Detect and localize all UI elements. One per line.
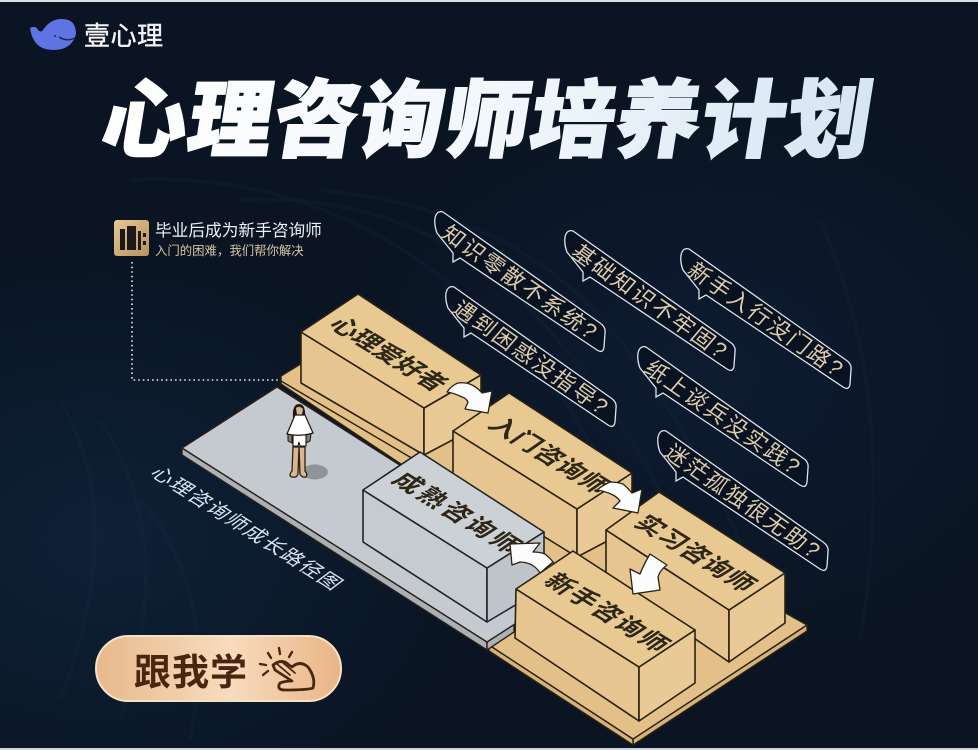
graduate note: 毕业后成为新手咨询师 [155, 221, 322, 240]
graduate note [114, 220, 322, 258]
speech bubble: 基础知识不牢固: 基础知识不牢固? [566, 240, 734, 364]
title: 心理咨询师培养计划 [96, 73, 879, 168]
arrows [447, 383, 667, 594]
icon: tapping hand [260, 648, 314, 690]
box labels: 实习咨询师 [628, 512, 762, 597]
grey platform [182, 387, 582, 650]
speech bubble: 遇到困惑没指导: 遇到困惑没指导? [447, 296, 615, 420]
box labels: 新手咨询师 [538, 570, 677, 657]
icon: books [114, 220, 149, 256]
logo: 壹心理 [84, 21, 163, 51]
gold platform [281, 352, 807, 745]
platforms [182, 352, 807, 745]
button: 跟我学 [96, 636, 341, 701]
side label: 心理咨询师成长路径图 [145, 464, 348, 594]
box: 成熟咨询师 [363, 452, 544, 622]
speech bubble: 迷茫孤独很无助: 迷茫孤独很无助? [659, 440, 827, 564]
box: 入门咨询师 [453, 393, 632, 557]
graduate note: 入门的困难，我们帮你解决 [155, 243, 304, 258]
box labels [323, 313, 762, 657]
dotted connector [132, 262, 300, 380]
box labels: 心理爱好者 [323, 313, 453, 396]
logo [30, 19, 163, 51]
box labels: 入门咨询师 [482, 414, 616, 499]
box labels: 成熟咨询师 [386, 468, 530, 559]
button: 跟我学: 跟我学 [134, 652, 248, 693]
box: 新手咨询师 [515, 551, 695, 721]
speech bubble: 知识零散不系统: 知识零散不系统? [436, 221, 604, 345]
person [287, 404, 328, 480]
speech bubble: 新手入行没门路: 新手入行没门路? [682, 258, 850, 382]
box: 心理爱好者 [301, 294, 481, 455]
speech bubble: 纸上谈兵没实践: 纸上谈兵没实践? [639, 356, 807, 480]
box: 实习咨询师 [606, 492, 785, 662]
